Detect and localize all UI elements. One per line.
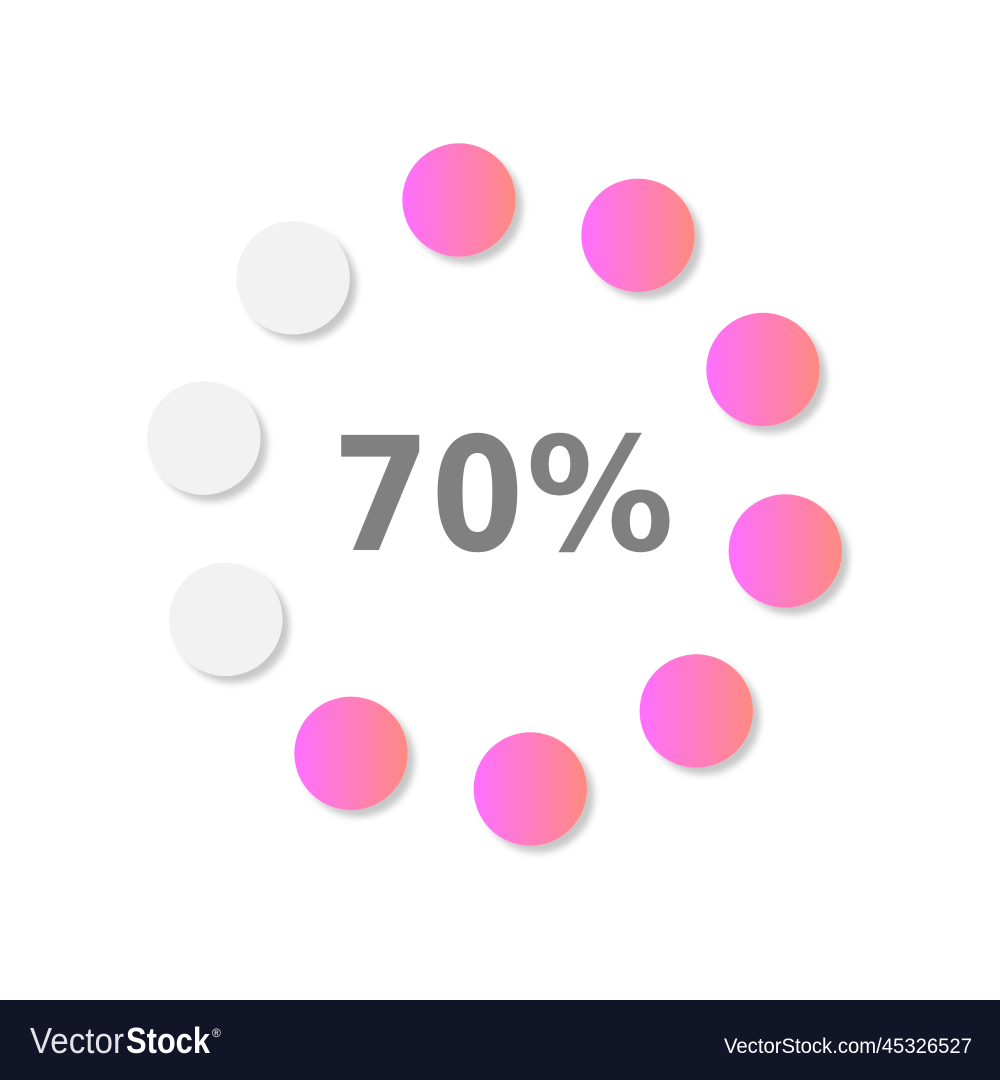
active dot 1 [402, 143, 516, 257]
footer image id: VectorStock.com/45326527 [724, 1035, 972, 1058]
active dot 3 [706, 313, 820, 426]
active dot 4 [729, 494, 842, 608]
active dot 2 [581, 179, 695, 292]
footer logo [30, 1020, 211, 1061]
active dot 6 [474, 732, 587, 846]
inactive dot 9 [147, 381, 260, 495]
percentage label: % [526, 404, 674, 588]
active dot 7 [294, 697, 408, 810]
progress ring of ten dots [147, 143, 842, 846]
percentage label: 7 [332, 405, 431, 588]
registered mark: ® [212, 1026, 221, 1040]
inactive dot 10 [236, 221, 350, 334]
footer logo: Vector [30, 1020, 124, 1061]
footer logo: Stock [126, 1020, 211, 1061]
active dot 5 [640, 654, 753, 768]
footer bar [0, 1000, 1000, 1080]
inactive dot 8 [169, 563, 282, 676]
percentage label [332, 404, 674, 588]
percentage label: 0 [431, 404, 524, 588]
